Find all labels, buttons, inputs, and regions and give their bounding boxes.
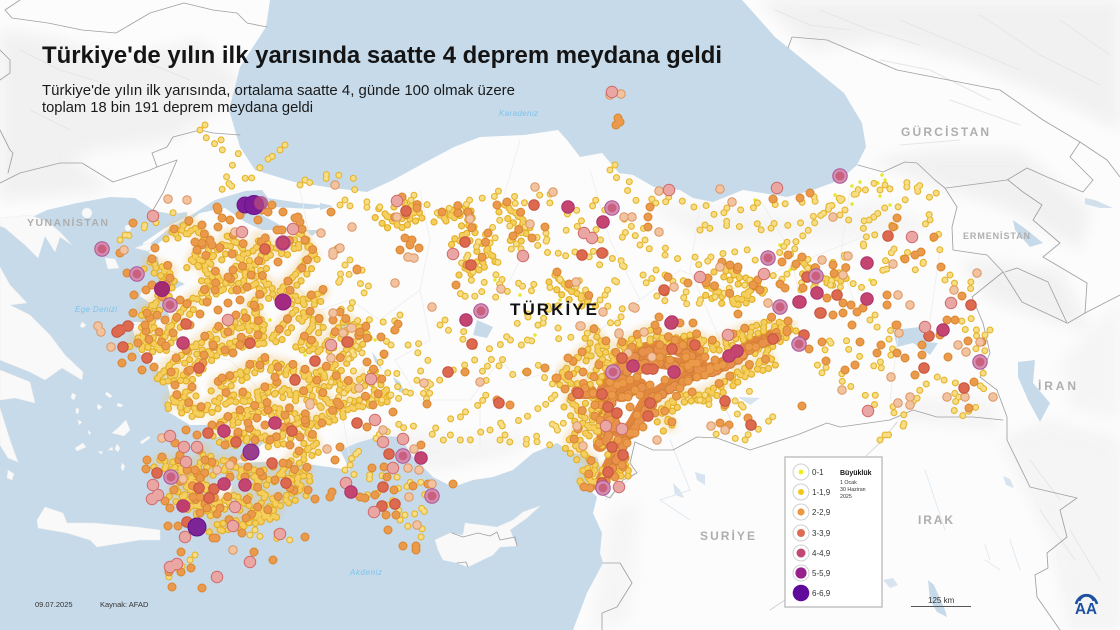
earthquake dots: magnitude 3-3.9 pale (152, 92, 951, 577)
subtitle (42, 82, 515, 116)
sea of marmara (137, 190, 330, 258)
subtitle: Türkiye'de yılın ilk yarısında, ortalama saatte 4, günde 100 olmak üzere (42, 82, 515, 99)
earthquake dots: magnitude 4-4.9 pale (102, 176, 980, 496)
subtitle: toplam 18 bin 191 deprem meydana geldi (42, 99, 313, 116)
country and sea labels: SURİYE (700, 528, 755, 543)
earthquake dots: magnitude 0-1 (tiny) (240, 175, 905, 380)
earthquake dots: magnitude 3-3.9 (117, 205, 971, 522)
lakes and rivers (305, 198, 1113, 617)
country and sea labels: Ege Denizi (75, 305, 117, 314)
legend: 30 Haziran (840, 487, 866, 493)
country and sea labels: İRAN (1038, 378, 1076, 393)
earthquake dots: magnitude 4-4.9 (162, 207, 943, 506)
country and sea labels: TÜRKİYE (510, 300, 597, 319)
greek land and islands (0, 208, 540, 567)
earthquake dots: magnitude 2-2.9 dense extra (137, 197, 847, 522)
scale bar: 125 km (928, 596, 955, 605)
date and source: Kaynak: AFAD (100, 600, 149, 609)
province borders (160, 140, 940, 460)
earthquake dots: magnitude 0-1.9 dense (129, 200, 851, 532)
legend: 2-2,9 (812, 508, 831, 517)
legend: Büyüklük (840, 470, 872, 477)
country and sea labels: Akdeniz (349, 568, 382, 577)
country and sea labels: ERMENİSTAN (963, 231, 1030, 241)
legend: 4-4,9 (812, 549, 831, 558)
legend: 1-1,9 (812, 488, 831, 497)
legend: 0-1 (812, 468, 824, 477)
date and source (35, 600, 149, 609)
country and sea labels: Karadeniz (499, 109, 538, 118)
earthquake band: dense cluster wash (135, 200, 845, 525)
icon: AA logo: AA (1075, 601, 1097, 618)
black sea (229, 0, 866, 202)
scale bar (911, 596, 971, 606)
country and sea labels: GÜRCİSTAN (901, 124, 989, 139)
earthquake dots: magnitude 5 and above (154, 196, 291, 536)
title: Türkiye'de yılın ilk yarısında saatte 4 deprem meydana geldi (42, 42, 722, 69)
legend (785, 457, 882, 607)
earthquake dots: magnitude 2-2.9 (120, 118, 982, 588)
legend: 6-6,9 (812, 589, 831, 598)
date and source: 09.07.2025 (35, 600, 73, 609)
legend: 3-3,9 (812, 529, 831, 538)
legend: 2025 (840, 494, 852, 500)
aegean and mediterranean sea (0, 197, 603, 630)
legend: 5-5,9 (812, 569, 831, 578)
country and sea labels: IRAK (918, 513, 953, 527)
legend: 1 Ocak (840, 480, 857, 486)
earthquake dots: magnitude 2-2.9 pale (98, 94, 993, 550)
country and sea labels (27, 109, 1076, 577)
country and sea labels: YUNANİSTAN (27, 216, 108, 229)
earthquake dots: magnitude 1-1.9 scattered (120, 125, 990, 580)
earthquake band: dense fault underlay (578, 335, 775, 485)
